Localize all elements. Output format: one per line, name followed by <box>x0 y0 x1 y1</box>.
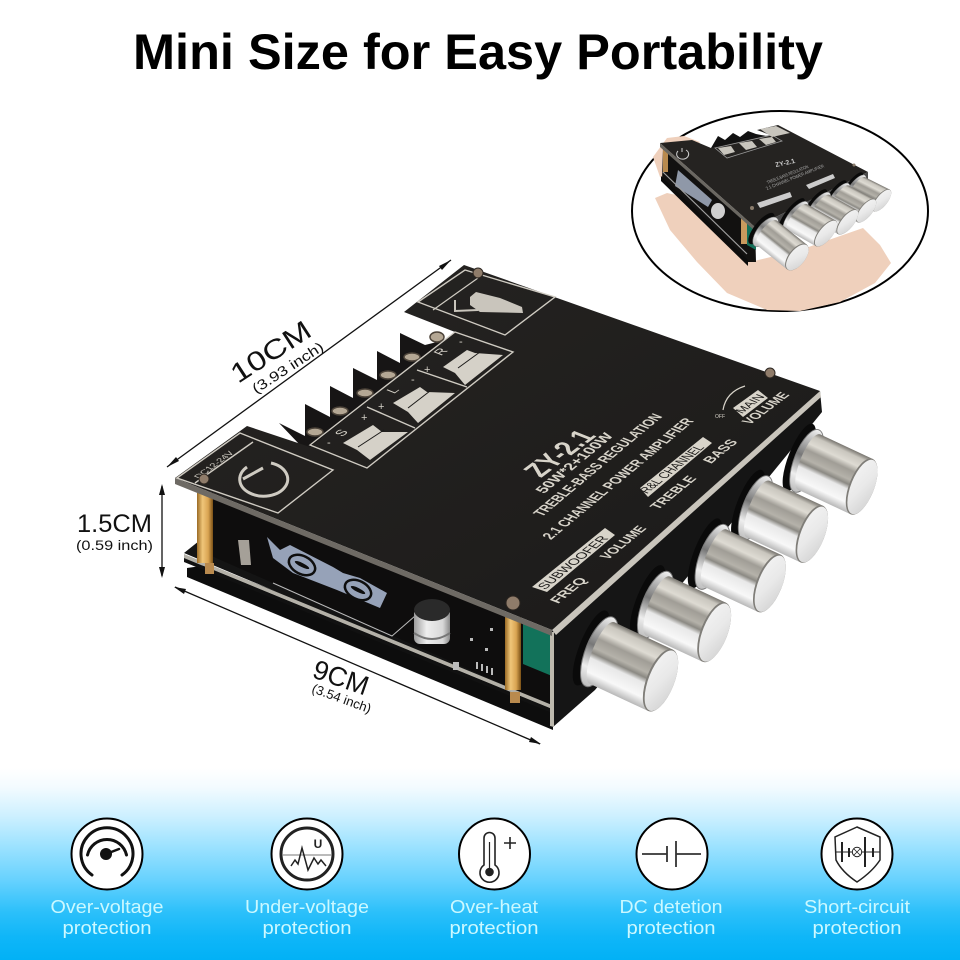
dimension: 1.5CM <box>76 484 165 578</box>
speaker output box: + <box>378 401 384 413</box>
speaker output box: + <box>361 412 367 424</box>
blue gradient band <box>0 768 960 960</box>
feature: under-voltage <box>245 818 369 938</box>
dimension: 1.5CM: (0.59 inch) <box>76 537 153 553</box>
speaker output box: + <box>424 364 430 376</box>
small board: TREBLE-BASS REGULATION <box>766 164 810 186</box>
main volume label: OFF <box>715 414 725 420</box>
feature: under-voltage: protection <box>262 918 352 938</box>
subwoofer label: FREQ <box>546 575 590 605</box>
icon: shield <box>835 827 880 882</box>
lower boards <box>184 541 553 730</box>
speaker output box: - <box>459 336 463 348</box>
icon: gauge <box>81 828 133 875</box>
feature: DC detection: DC detetion <box>620 897 722 917</box>
R&L channel label: TREBLE <box>646 474 700 511</box>
dimension: 9CM: (3.54 inch) <box>310 681 373 716</box>
icon: waveform: U <box>314 837 322 851</box>
speaker output box: L <box>383 385 403 395</box>
subwoofer label <box>532 524 650 605</box>
power box <box>177 433 333 513</box>
electrolytic capacitor <box>238 537 415 636</box>
speaker output box: - <box>411 374 415 386</box>
plate printed text: 50W*2+100W <box>532 430 618 495</box>
hand <box>653 136 891 311</box>
main volume label: MAIN <box>732 393 768 415</box>
feature: short-circuit <box>804 818 910 938</box>
plate printed text: TREBLE-BASS REGULATION <box>530 412 667 518</box>
amplifier board <box>175 265 887 730</box>
speaker output box: R <box>430 346 451 357</box>
plate printed text: 2.1 CHANNEL POWER AMPLIFIER <box>539 416 698 541</box>
standoffs <box>197 493 521 703</box>
R&L channel label: R&L CHANNEL <box>636 443 708 495</box>
feature: over-heat: protection <box>450 918 538 938</box>
feature: over-heat <box>450 818 538 938</box>
hand knobs <box>744 170 897 277</box>
plate screws <box>199 268 775 610</box>
dimension: 9CM <box>174 587 541 744</box>
small board: ZY-2.1 <box>774 158 796 169</box>
subwoofer label: SUBWOOFER <box>534 534 612 591</box>
small board: 2.1 CHANNEL POWER AMPLIFIER <box>765 164 826 192</box>
feature: over-voltage: protection <box>62 918 152 938</box>
feature: under-voltage: Under-voltage <box>245 897 369 917</box>
feature: DC detection: protection <box>626 918 716 938</box>
R&L channel label <box>636 437 741 511</box>
feature: short-circuit: Short-circuit <box>804 897 910 917</box>
speaker output box: - <box>327 437 331 449</box>
inset: amplifier held in hand <box>632 111 928 311</box>
icon: thermometer <box>480 833 516 882</box>
dimension: 10CM: (3.93 inch) <box>249 338 326 397</box>
plate printed text <box>517 412 698 541</box>
input connector box <box>418 270 555 335</box>
feature: over-voltage <box>50 818 164 938</box>
dimension: 9CM: 9CM <box>309 654 373 701</box>
plate printed text: ZY-2.1 <box>517 426 604 481</box>
main volume label <box>715 386 793 426</box>
board side details <box>675 170 712 207</box>
circuit traces and chips <box>453 628 493 675</box>
feature: over-heat: Over-heat <box>450 897 538 917</box>
speaker output box <box>310 332 513 468</box>
small board <box>660 125 897 277</box>
top plate <box>175 265 820 630</box>
title: Mini Size for Easy Portability <box>133 24 823 80</box>
power label: DC12-24V <box>191 450 236 480</box>
screw terminals <box>279 332 445 450</box>
pcb silver edge <box>184 554 552 709</box>
feature: short-circuit: protection <box>812 918 902 938</box>
dimension: 10CM: 10CM <box>225 315 317 389</box>
subwoofer label: VOLUME <box>596 524 650 561</box>
dimension: 10CM <box>167 260 451 467</box>
feature: DC detection <box>620 818 722 938</box>
small plate <box>660 125 868 227</box>
green pcb edge <box>523 622 552 676</box>
knobs <box>565 419 887 723</box>
dark interior <box>198 494 552 706</box>
speaker output box: S <box>331 427 352 438</box>
R&L channel label: BASS <box>699 437 741 465</box>
dimension: 1.5CM: 1.5CM <box>77 510 152 538</box>
feature: over-voltage: Over-voltage <box>50 897 164 917</box>
right side panel <box>552 391 822 727</box>
icon: capacitor symbol <box>642 841 701 867</box>
main volume label: VOLUME <box>738 390 793 426</box>
small capacitor <box>414 599 450 644</box>
terminals <box>711 131 772 155</box>
